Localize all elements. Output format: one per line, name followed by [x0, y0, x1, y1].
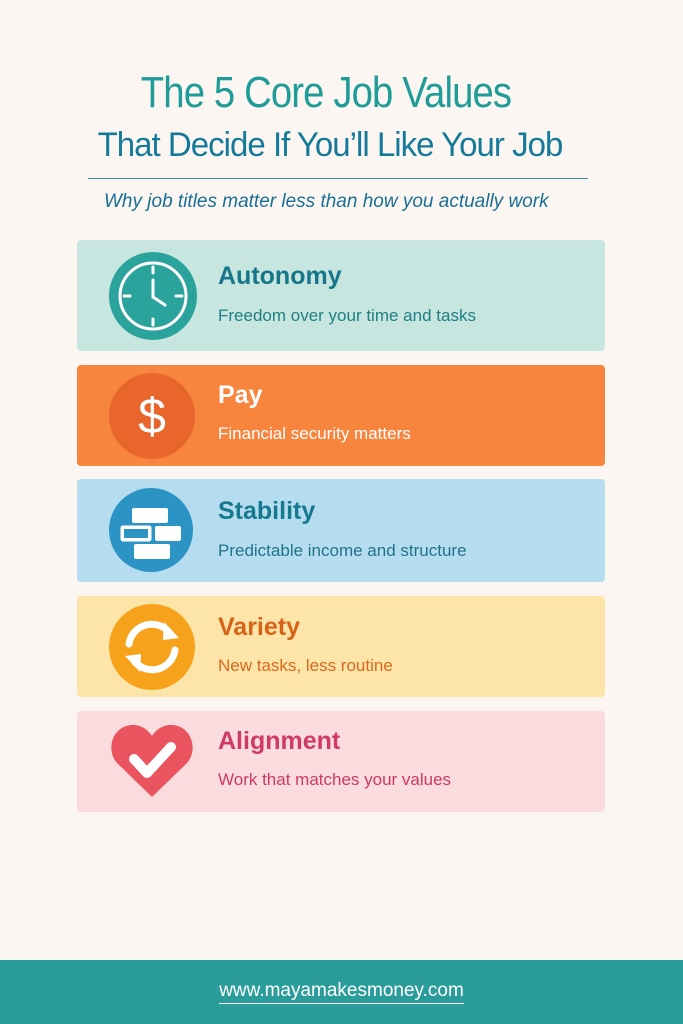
panel: variety [77, 596, 605, 697]
icon: dollar [109, 373, 195, 459]
heading: Autonomy [218, 262, 342, 290]
heading: Alignment [218, 727, 340, 755]
heading: Stability [218, 497, 315, 525]
website url: www.mayamakesmoney.com [219, 980, 464, 1001]
text: Work that matches your values [218, 770, 451, 789]
panel: autonomy [77, 240, 605, 351]
subtitle: Why job titles matter less than how you actually work [104, 191, 549, 212]
icon: dollar: $ [138, 388, 166, 444]
text: Freedom over your time and tasks [218, 306, 476, 325]
heading: Variety [218, 613, 300, 641]
icon: bricks [109, 488, 193, 572]
title line 1: The 5 Core Job Values [141, 68, 511, 117]
heading: Pay [218, 381, 262, 409]
icon: cycle arrows [109, 604, 195, 690]
title line 2: That Decide If You’ll Like Your Job [98, 126, 562, 164]
text: Predictable income and structure [218, 541, 467, 560]
icon: heart check [111, 725, 193, 797]
icon: clock [109, 252, 197, 340]
text: New tasks, less routine [218, 656, 393, 675]
footer [0, 960, 683, 1024]
panel: alignment [77, 711, 605, 812]
text: Financial security matters [218, 424, 411, 443]
panel: stability [77, 479, 605, 582]
panel: pay [77, 365, 605, 466]
